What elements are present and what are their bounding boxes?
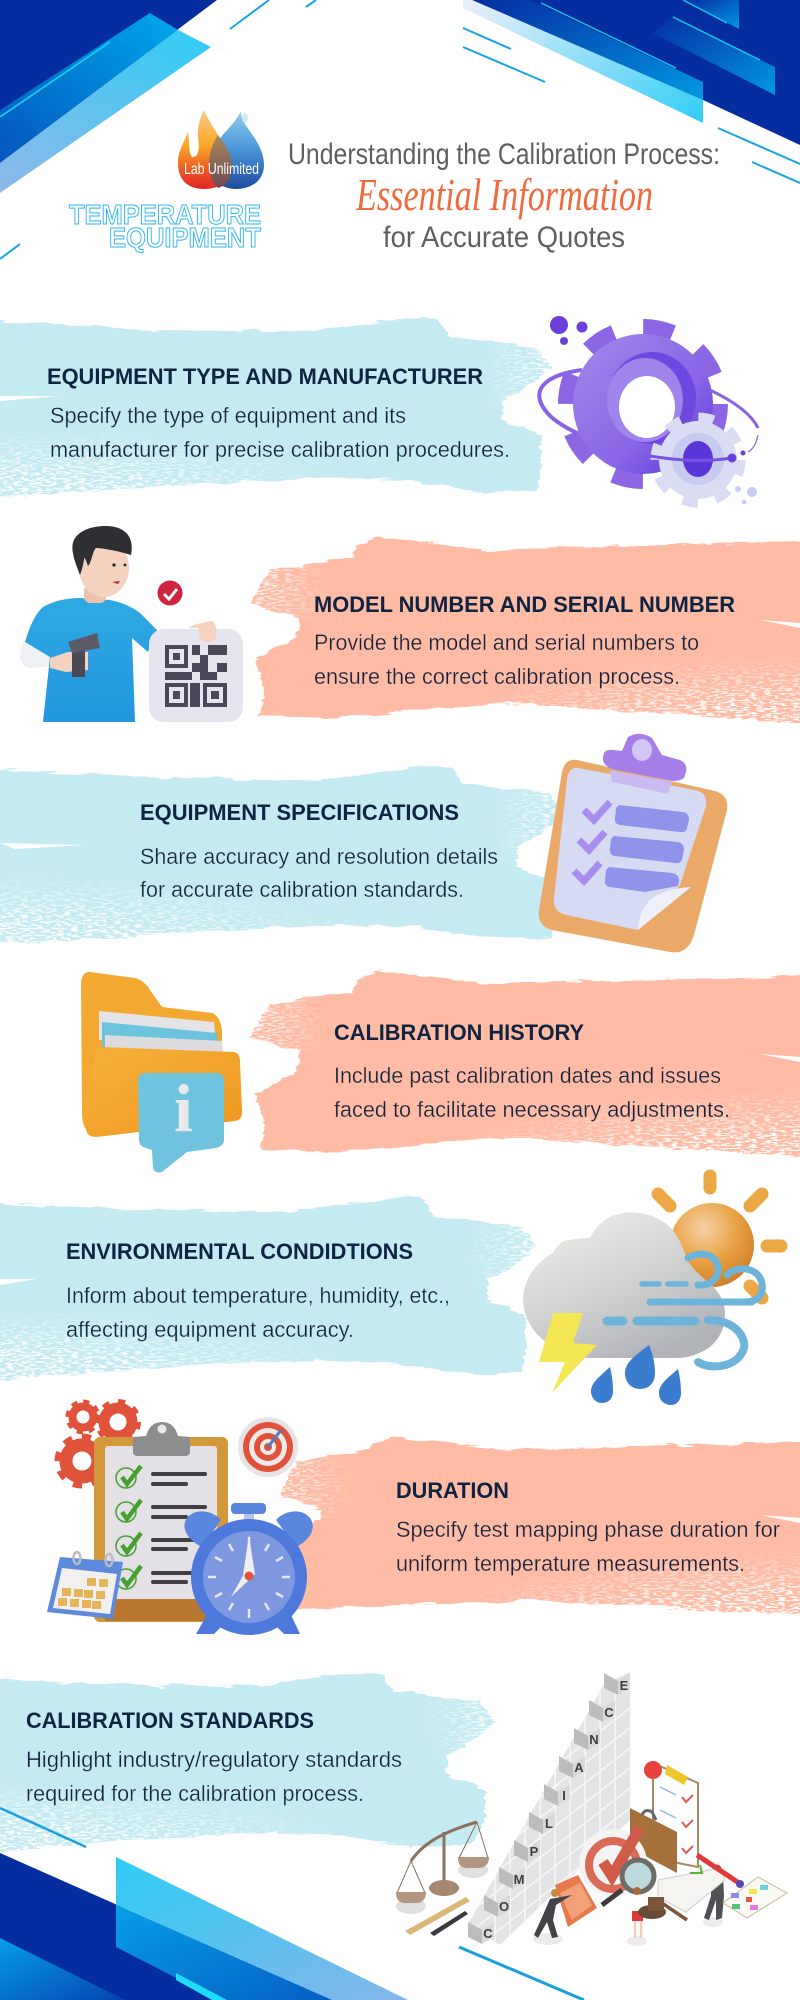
body text: required for the calibration process. — [26, 1781, 364, 1806]
body text — [396, 1517, 780, 1576]
ruler and pen — [405, 1897, 470, 1936]
body text: Highlight industry/regulatory standards — [26, 1747, 402, 1772]
illustration: compliance — [396, 1672, 788, 1946]
body text: Share accuracy and resolution details — [140, 844, 498, 869]
background decoration: top right blue shapes — [463, 0, 800, 183]
letter cubes: C — [604, 1705, 614, 1720]
body text: affecting equipment accuracy. — [66, 1317, 354, 1342]
title — [288, 138, 720, 254]
letter cubes: M — [514, 1872, 524, 1887]
panel: calibration standards — [0, 1672, 505, 1855]
logo: Lab Unlimited flame and drop: Lab Unlimited — [184, 161, 259, 178]
scales — [396, 1822, 489, 1914]
icon: weather — [523, 1176, 781, 1405]
body text: Inform about temperature, humidity, etc., — [66, 1283, 450, 1308]
logo caption: Temperature Equipment: EQUIPMENT — [109, 222, 261, 253]
body text: Specify test mapping phase duration for — [396, 1517, 780, 1542]
body text: Specify the type of equipment and its — [50, 403, 406, 428]
icon: folder with info bubble — [81, 972, 242, 1172]
title: Understanding the Calibration Process: — [288, 138, 720, 171]
body text: Include past calibration dates and issues — [334, 1063, 721, 1088]
body text: Provide the model and serial numbers to — [314, 630, 699, 655]
panel: equipment type and manufacturer — [0, 317, 560, 500]
title: Essential Information — [355, 169, 653, 220]
body text: for accurate calibration standards. — [140, 877, 464, 902]
body text — [26, 1747, 402, 1806]
logo caption: Temperature Equipment: TEMPERATURE — [69, 199, 261, 230]
icon: checklist with gears, target, calendar and alarm clock — [47, 1402, 313, 1635]
icon: QR card — [149, 621, 243, 722]
logo caption: Temperature Equipment — [69, 199, 261, 253]
panel: calibration history — [240, 970, 800, 1162]
letter cubes: N — [589, 1732, 599, 1747]
people — [533, 1864, 724, 1946]
panel: environmental conditions — [0, 1197, 545, 1380]
magnifying glass — [602, 1860, 654, 1905]
heading: EQUIPMENT TYPE AND MANUFACTURER — [47, 364, 483, 389]
open book, gavel and pencil — [638, 1855, 744, 1920]
check mark disc — [579, 1828, 647, 1897]
body text — [140, 844, 498, 902]
body text: faced to facilitate necessary adjustments. — [334, 1097, 730, 1122]
staircase wall — [467, 1672, 630, 1945]
icon: target — [238, 1417, 298, 1477]
letter cubes: O — [499, 1899, 509, 1914]
binders — [555, 1875, 597, 1927]
letter cubes: C — [483, 1926, 493, 1941]
icon: clipboard checklist — [539, 734, 727, 952]
flowchart sheet — [723, 1877, 787, 1918]
letter cubes: E — [620, 1678, 629, 1693]
body text — [334, 1063, 730, 1122]
heading: EQUIPMENT SPECIFICATIONS — [140, 800, 459, 825]
letter cubes — [468, 1673, 630, 1944]
panel: model number and serial number — [240, 536, 800, 728]
document clipboard — [644, 1761, 698, 1867]
heading: CALIBRATION STANDARDS — [26, 1708, 314, 1733]
icon: check badge — [158, 580, 182, 606]
background decoration: bottom blue shapes — [0, 1808, 584, 2000]
icon: man scanning QR code — [20, 526, 243, 722]
icon: folder with info bubble: i — [174, 1070, 193, 1146]
icon: calendar — [47, 1552, 123, 1619]
letter cubes: L — [545, 1816, 553, 1831]
body text — [314, 630, 699, 689]
heading: MODEL NUMBER AND SERIAL NUMBER — [314, 592, 735, 617]
body text — [66, 1283, 450, 1342]
heading: ENVIRONMENTAL CONDIDTIONS — [66, 1239, 413, 1264]
panel: duration — [265, 1437, 800, 1620]
letter cubes: A — [574, 1760, 584, 1775]
body text: ensure the correct calibration process. — [314, 664, 680, 689]
heading: DURATION — [396, 1478, 509, 1503]
icon: alarm clock — [184, 1503, 313, 1635]
briefcase — [630, 1808, 677, 1873]
heading: CALIBRATION HISTORY — [334, 1020, 584, 1045]
title: for Accurate Quotes — [383, 221, 625, 254]
logo: Lab Unlimited flame and drop — [178, 110, 264, 189]
body text: manufacturer for precise calibration procedures. — [50, 437, 510, 462]
panel: equipment specifications — [0, 764, 570, 945]
icon: purple gears — [539, 316, 758, 504]
body text — [50, 403, 510, 462]
background decoration: top left blue shapes — [0, 0, 316, 259]
letter cubes: P — [530, 1844, 539, 1859]
body text: uniform temperature measurements. — [396, 1551, 745, 1576]
letter cubes: I — [562, 1788, 566, 1803]
